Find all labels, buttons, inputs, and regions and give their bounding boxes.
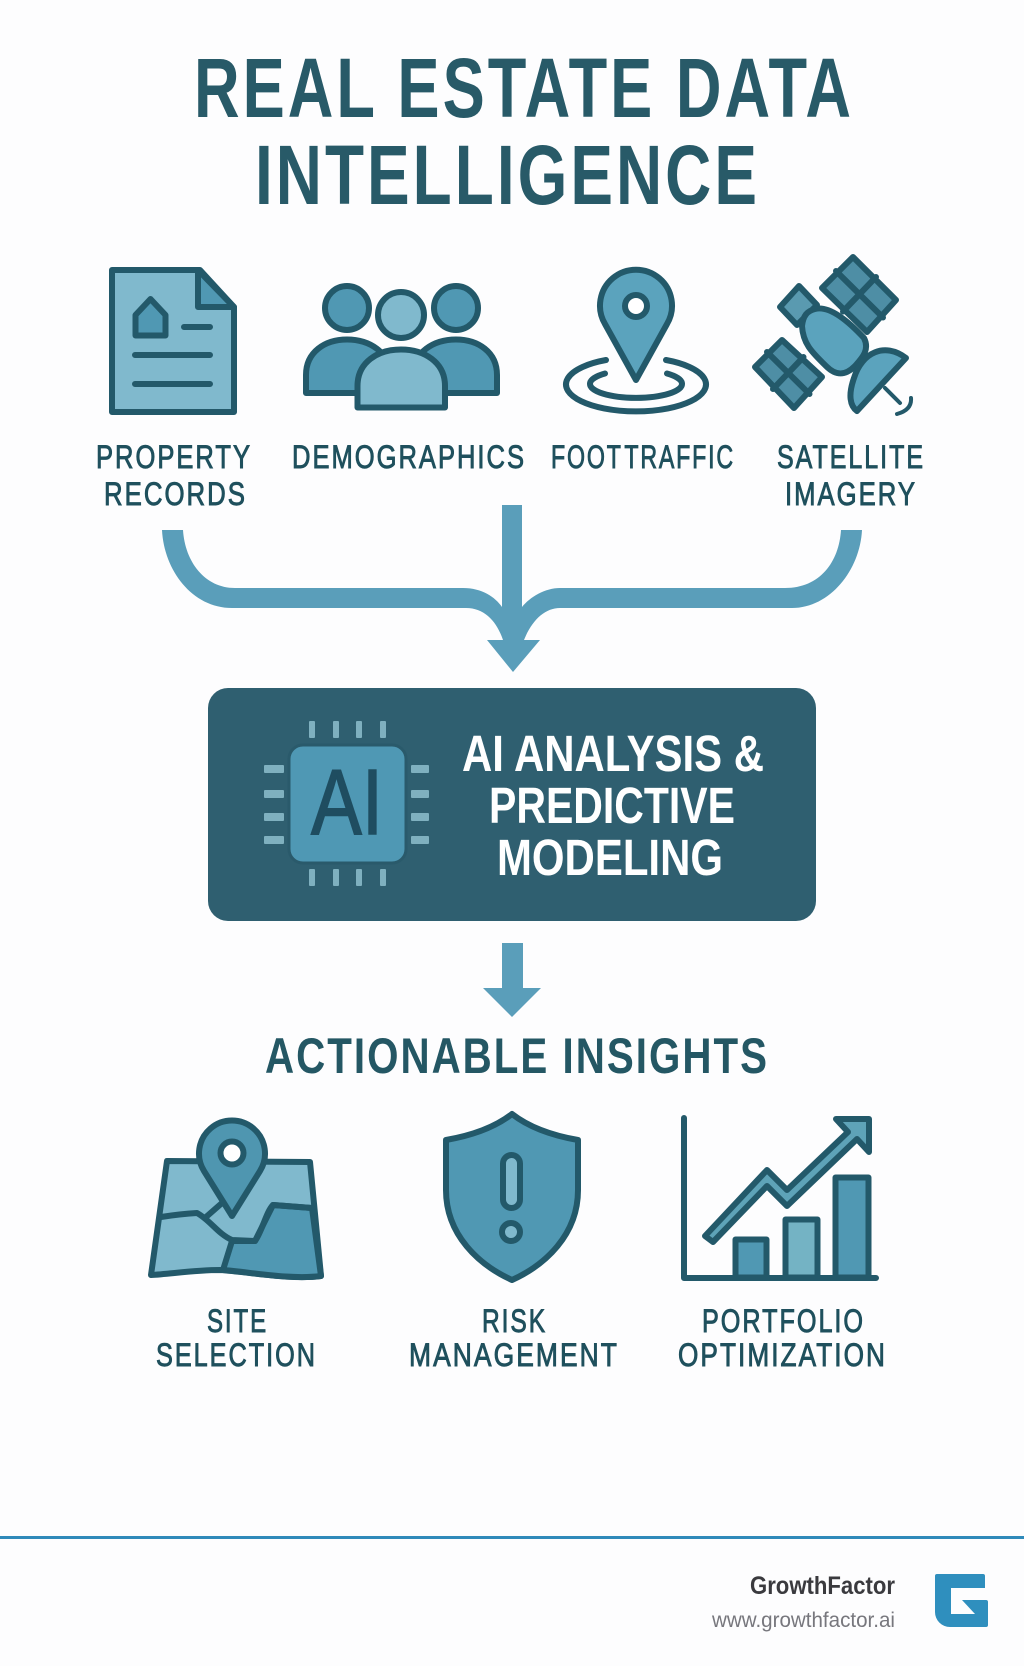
icon: AI chip — [264, 721, 429, 886]
arrow: data sources merge — [162, 505, 862, 672]
label: risk management — [409, 1303, 619, 1373]
label: portfolio optimization — [678, 1303, 887, 1373]
title: INTELLIGENCE — [255, 128, 760, 222]
icon: property records document — [112, 270, 234, 412]
label: satellite imagery — [777, 439, 925, 512]
text: AI analysis heading: PREDICTIVE — [489, 777, 735, 834]
icon: foot traffic pin — [566, 270, 706, 411]
label: portfolio optimization: OPTIMIZATION — [678, 1337, 887, 1373]
text: AI analysis heading: MODELING — [497, 829, 723, 886]
heading: actionable insights: ACTIONABLE INSIGHTS — [265, 1028, 769, 1084]
label: demographics: DEMOGRAPHICS — [292, 439, 526, 475]
label: property records: PROPERTY — [96, 439, 252, 475]
label: site selection: SITE — [207, 1303, 268, 1339]
icon: satellite — [755, 257, 911, 414]
icon: GrowthFactor logo — [935, 1574, 988, 1627]
title — [194, 41, 854, 222]
text: AI analysis heading: AI ANALYSIS & — [462, 725, 764, 782]
label: risk management: MANAGEMENT — [409, 1337, 619, 1373]
label: satellite imagery: IMAGERY — [785, 476, 917, 512]
panel: AI analysis — [208, 688, 816, 921]
icon: portfolio chart — [684, 1118, 876, 1278]
footer brand text — [711, 1572, 895, 1632]
label: satellite imagery: SATELLITE — [777, 439, 925, 475]
label: site selection — [156, 1303, 317, 1373]
icon: demographics people — [306, 286, 497, 408]
icon: site selection map — [151, 1121, 321, 1277]
footer brand text: www.growthfactor.ai — [711, 1609, 895, 1632]
icon: AI chip: AI — [311, 750, 383, 854]
label: property records: RECORDS — [104, 476, 247, 512]
label: risk management: RISK — [482, 1303, 547, 1339]
label: site selection: SELECTION — [156, 1337, 317, 1373]
icon: risk management shield — [446, 1114, 578, 1280]
text: AI analysis heading — [462, 725, 764, 886]
label: property records — [96, 439, 252, 512]
arrow: down to insights — [483, 943, 541, 1017]
label: portfolio optimization: PORTFOLIO — [702, 1303, 865, 1339]
footer brand text: GrowthFactor — [750, 1572, 895, 1600]
label: foot traffic: FOOT TRAFFIC — [551, 439, 735, 475]
